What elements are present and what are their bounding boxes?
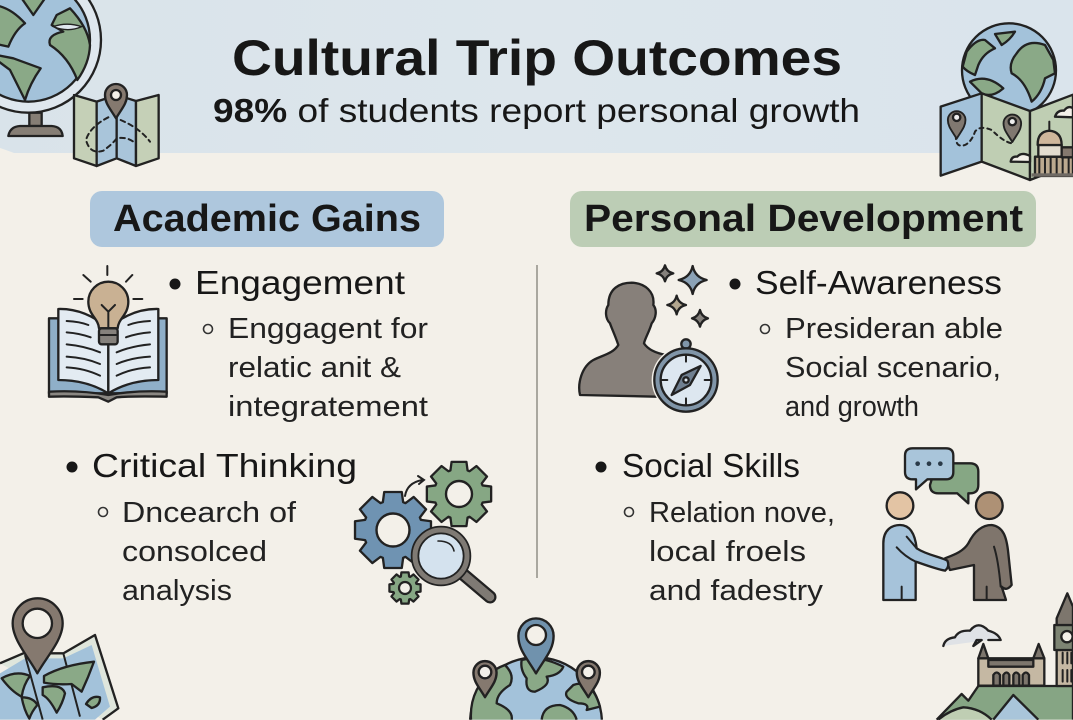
icon: globe and map with landmark [941,23,1073,180]
sub-bullet: Critical Thinking detail [98,497,297,607]
sub-bullet: Engagement detail: relatic anit & [228,352,401,384]
sub-bullet: Social Skills detail [624,497,835,607]
icon: landmark hillside [937,593,1073,720]
badge: Academic Gains [90,191,444,247]
icon: desk globe [0,0,101,136]
icon: folded map with pin [74,84,159,166]
badge: Personal Development: Personal Development [584,198,1023,240]
sub-bullet: Critical Thinking detail: analysis [122,575,232,607]
badge: Academic Gains: Academic Gains [113,198,421,240]
icon: globe with three pins [470,618,602,720]
sub-bullet: Engagement detail: Enggagent for [228,313,428,345]
sub-bullet: Social Skills detail: and fadestry [649,575,824,607]
sub-bullet: Critical Thinking detail: consolced [122,536,267,568]
sub-bullet: Engagement detail: integratement [228,391,428,423]
icon: gears and magnifying glass [355,462,491,604]
icon: person with compass and stars [579,265,720,414]
divider [536,265,538,578]
title: Cultural Trip Outcomes [232,30,842,86]
bullet: Social Skills: Social Skills [622,447,800,484]
sub-bullet: Self-Awareness detail: and growth [785,391,919,423]
badge: Personal Development [570,191,1036,247]
sub-bullet: Critical Thinking detail: Dncearch of [122,497,297,529]
icon: open book with lightbulb [49,266,167,402]
bullet: Self-Awareness: Self-Awareness [755,264,1002,301]
header band [0,0,1073,153]
icon: handshake with speech bubbles [883,448,1012,600]
sub-bullet: Self-Awareness detail [760,313,1003,423]
sub-bullet: Engagement detail [204,313,428,423]
bullet: Engagement: Engagement [195,264,405,301]
subtitle: 98% of students report personal growth [213,92,860,129]
sub-bullet: Social Skills detail: local froels [649,536,806,568]
bullet: Critical Thinking: Critical Thinking [92,447,357,484]
sub-bullet: Self-Awareness detail: Social scenario, [785,352,1001,384]
sub-bullet: Social Skills detail: Relation nove, [649,497,835,529]
icon: world map with pin [0,598,118,720]
sub-bullet: Self-Awareness detail: Presideran able [785,313,1003,345]
